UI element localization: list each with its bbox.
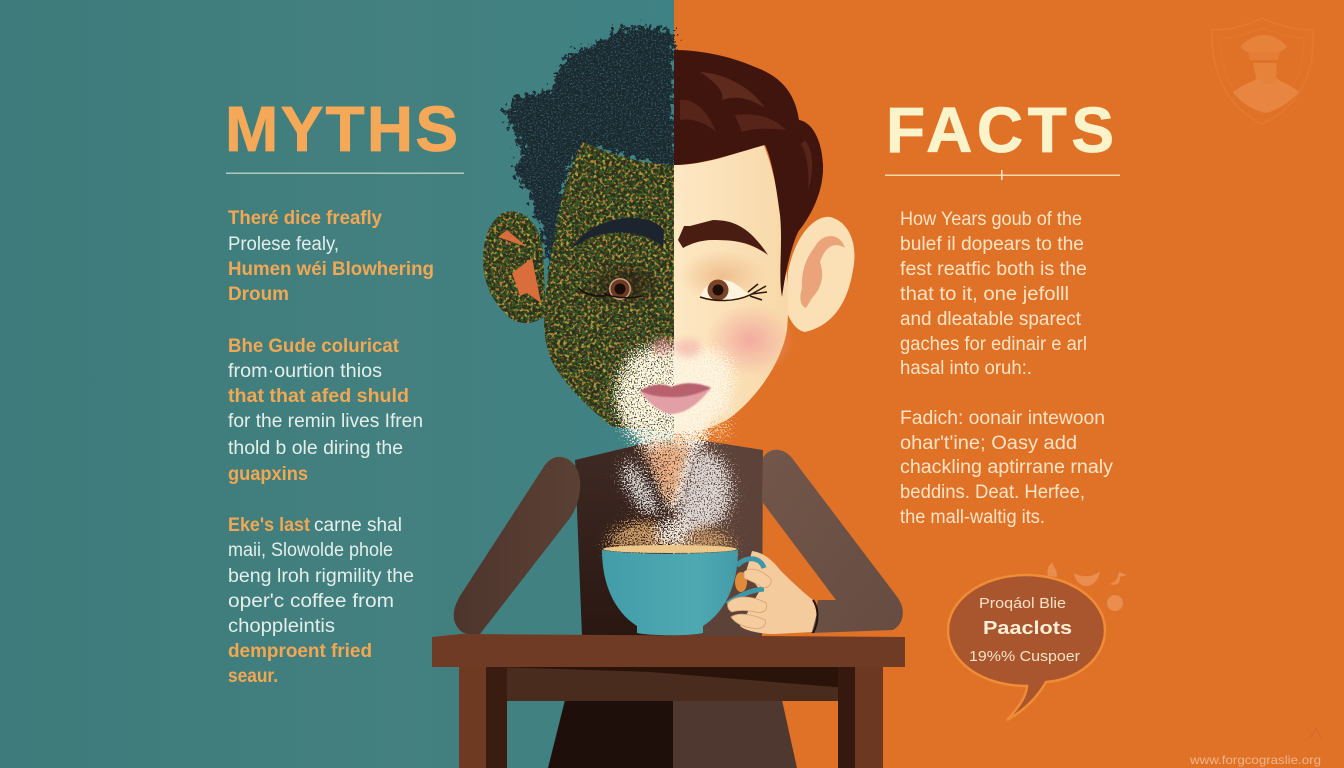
text block: fact one: bulef il dopears to the: [900, 234, 1084, 255]
myths heading rule: [226, 172, 464, 174]
bubble shape: [948, 575, 1105, 720]
callout: speech bubble: [948, 575, 1105, 720]
sleeve cuff: [813, 600, 818, 633]
palm and back of hand: [740, 551, 817, 634]
panel: facts background: [674, 0, 1344, 768]
torso: [575, 440, 763, 636]
text block: fact one: fest reatfic both is the: [900, 259, 1087, 280]
tan powder above cup: [600, 518, 742, 552]
text block: myth three: [228, 515, 414, 687]
text block: fact two: the mall-waltig its.: [900, 507, 1045, 528]
table left leg: [459, 667, 507, 768]
powder dissolving around chin: [613, 342, 735, 525]
text block: myth one: Prolese fealy,: [228, 234, 339, 255]
left eyebrow: [570, 218, 664, 250]
bubble text: Paaclots: [983, 618, 1072, 638]
powder stream right: [668, 445, 734, 545]
left eye shading: [583, 259, 667, 311]
text block: myth two: for the remin lives Ifren: [228, 411, 423, 432]
text block: myth three: choppleintis: [228, 616, 335, 637]
icon: watermark shield emblem: [1212, 18, 1313, 124]
hand on cup: [727, 551, 818, 634]
heading: FACTS: FACTS: [886, 94, 1114, 166]
text block: myth two: guapxins: [228, 464, 308, 485]
left ear: [483, 211, 546, 323]
bubble text: 19%% Cuspoer: [969, 648, 1080, 665]
text block: myth three: oper'c coffee from: [228, 591, 394, 612]
text block: myth one: Droum: [228, 284, 289, 305]
text block: myth one: Humen wéi Blowhering: [228, 259, 434, 280]
text block: fact one: hasal into oruh:.: [900, 358, 1032, 379]
table apron: [495, 667, 847, 701]
text block: myth two: [228, 336, 423, 485]
table top: [432, 634, 905, 667]
left eye: [578, 278, 642, 300]
text block: myth one: [228, 208, 434, 305]
bubble text: Proqáol Blie: [979, 595, 1066, 612]
myths column: [225, 93, 464, 687]
source url: www.forgcograslie.org: [1189, 753, 1321, 767]
gap inside cup handle: [735, 572, 747, 592]
powder stream left: [618, 450, 668, 525]
coffee surface: [603, 545, 737, 553]
face: speckled left half: [544, 142, 674, 432]
table right leg: [838, 667, 883, 768]
hair: smooth right half: [674, 50, 823, 297]
panel: myths background: [0, 0, 674, 768]
right eye: [700, 280, 767, 301]
text block: myth two: from·ourtion thios: [228, 361, 382, 382]
text block: fact one: gaches for edinair e arl: [900, 334, 1087, 355]
right eye shading: [678, 250, 766, 302]
fingers: [728, 569, 771, 629]
icon: faint arrow: [1310, 728, 1321, 738]
illustration: person with coffee: [432, 26, 905, 768]
text block: myth two: that that afed shuld: [228, 386, 409, 407]
face: smooth right half: [674, 143, 788, 432]
white powder column into cup: [650, 515, 694, 548]
text block: myth three: carne shal: [314, 515, 402, 536]
facts column: [885, 94, 1120, 528]
text block: fact one: and dleatable sparect: [900, 309, 1082, 330]
hair: speckled left half: [504, 26, 674, 288]
text block: myth one: Theré dice freafly: [228, 208, 382, 229]
text block: myth three: maii, Slowolde phole: [228, 540, 393, 561]
right eyebrow: [678, 220, 768, 255]
ear patches: [498, 230, 541, 303]
cup bowl: [602, 550, 738, 635]
text block: fact two: [900, 408, 1114, 528]
icons: small decorations above bubble: [1047, 562, 1127, 611]
text block: fact one: that to it, one jefolll: [900, 284, 1069, 305]
left arm: [454, 457, 580, 635]
bubble text: [969, 595, 1080, 665]
table: [432, 634, 905, 768]
text block: fact two: Fadich: oonair intewoon: [900, 408, 1105, 429]
text block: fact one: [900, 209, 1087, 379]
text block: fact two: beddins. Deat. Herfee,: [900, 482, 1085, 503]
text block: myth three: seaur.: [228, 666, 278, 687]
text block: myth three: Eke's last: [228, 515, 311, 536]
neck skin: [640, 440, 697, 516]
text block: fact two: chackling aptirrane rnaly: [900, 457, 1114, 478]
nose tint: [652, 338, 701, 357]
blush: [706, 304, 794, 376]
text block: fact one: How Years goub of the: [900, 209, 1082, 230]
powder on orange beside neck: [705, 412, 732, 442]
text block: myth two: thold b ole diring the: [228, 438, 403, 459]
facts heading rule: [885, 170, 1120, 180]
coffee cup: [602, 545, 738, 635]
skirt below table: [548, 700, 797, 768]
mouth: [640, 383, 711, 414]
text block: myth two: Bhe Gude coluricat: [228, 336, 400, 357]
text block: myth three: demproent fried: [228, 641, 372, 662]
cup handle: [727, 559, 764, 604]
text block: fact two: ohar't'ine; Oasy add: [900, 433, 1077, 454]
heading: MYTHS: MYTHS: [225, 93, 458, 165]
right ear: [786, 217, 854, 332]
text block: myth three: beng lroh rigmility the: [228, 566, 414, 587]
right arm: [763, 450, 903, 633]
